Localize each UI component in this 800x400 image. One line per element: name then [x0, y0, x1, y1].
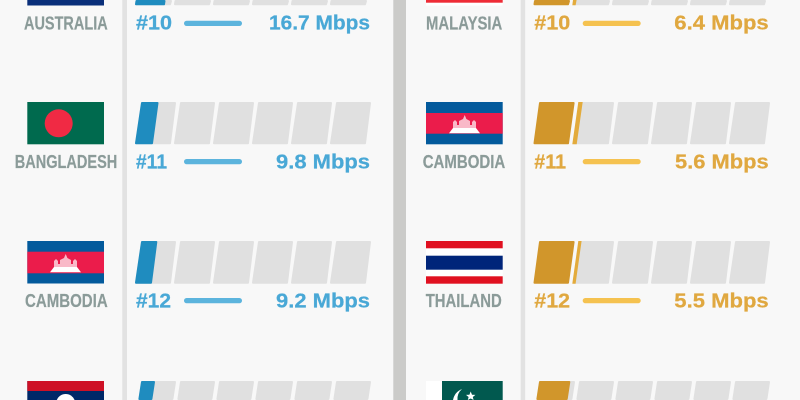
speed: 6.4 Mbps: 6.4 Mbps [674, 12, 769, 34]
speed bar: Laos [139, 382, 370, 399]
speed bar: Cambodia [534, 102, 769, 144]
speed bar: Australia [136, 1, 366, 4]
row: Thailand #12 [426, 241, 769, 312]
flag: Bangladesh [27, 102, 104, 144]
flag: Pakistan [426, 381, 503, 400]
speed bar: Thailand [534, 241, 769, 284]
row: Laos #13 [27, 381, 370, 400]
row: Cambodia #12 [25, 241, 370, 312]
flag: Australia [27, 0, 104, 6]
speed bar: Cambodia [136, 242, 370, 283]
label: Bangladesh: BANGLADESH [15, 152, 117, 172]
speed bar: Bangladesh [136, 103, 370, 143]
label: Malaysia: MALAYSIA [426, 13, 502, 33]
speed: 5.5 Mbps: 5.5 Mbps [674, 290, 769, 312]
dash [583, 21, 641, 26]
speed: 16.7 Mbps: 16.7 Mbps [269, 12, 370, 34]
rank: #12: #12 [136, 290, 171, 312]
row: Pakistan #13 [426, 381, 769, 400]
speed: 9.8 Mbps: 9.8 Mbps [276, 152, 370, 174]
speed bar: Pakistan [537, 382, 769, 399]
row: Australia #10 [24, 0, 370, 34]
flag: Laos [27, 381, 104, 400]
dash [583, 298, 641, 303]
dash [184, 298, 242, 303]
speed: 5.6 Mbps: 5.6 Mbps [675, 152, 769, 174]
row: Malaysia #10 [426, 0, 769, 34]
flag: Malaysia [426, 0, 503, 6]
speed bar: Malaysia [534, 0, 765, 5]
flag: Cambodia [426, 102, 503, 144]
rank: #10: #10 [534, 12, 570, 34]
flag: Thailand [426, 241, 503, 284]
label: Cambodia: CAMBODIA [423, 152, 505, 172]
rank: #11: #11 [534, 152, 566, 174]
dash [184, 159, 242, 164]
dash [184, 21, 242, 26]
flag: Cambodia [27, 241, 104, 284]
rank: #11: #11 [136, 152, 167, 174]
rank: #12: #12 [534, 290, 570, 312]
label: Cambodia: CAMBODIA [25, 291, 108, 311]
row: Cambodia #11 [423, 102, 769, 174]
row: Bangladesh #11 [15, 102, 370, 174]
label: Australia: AUSTRALIA [24, 13, 108, 33]
speed: 9.2 Mbps: 9.2 Mbps [276, 290, 370, 312]
dash [583, 159, 641, 164]
label: Thailand: THAILAND [426, 291, 502, 311]
rank: #10: #10 [136, 12, 172, 34]
